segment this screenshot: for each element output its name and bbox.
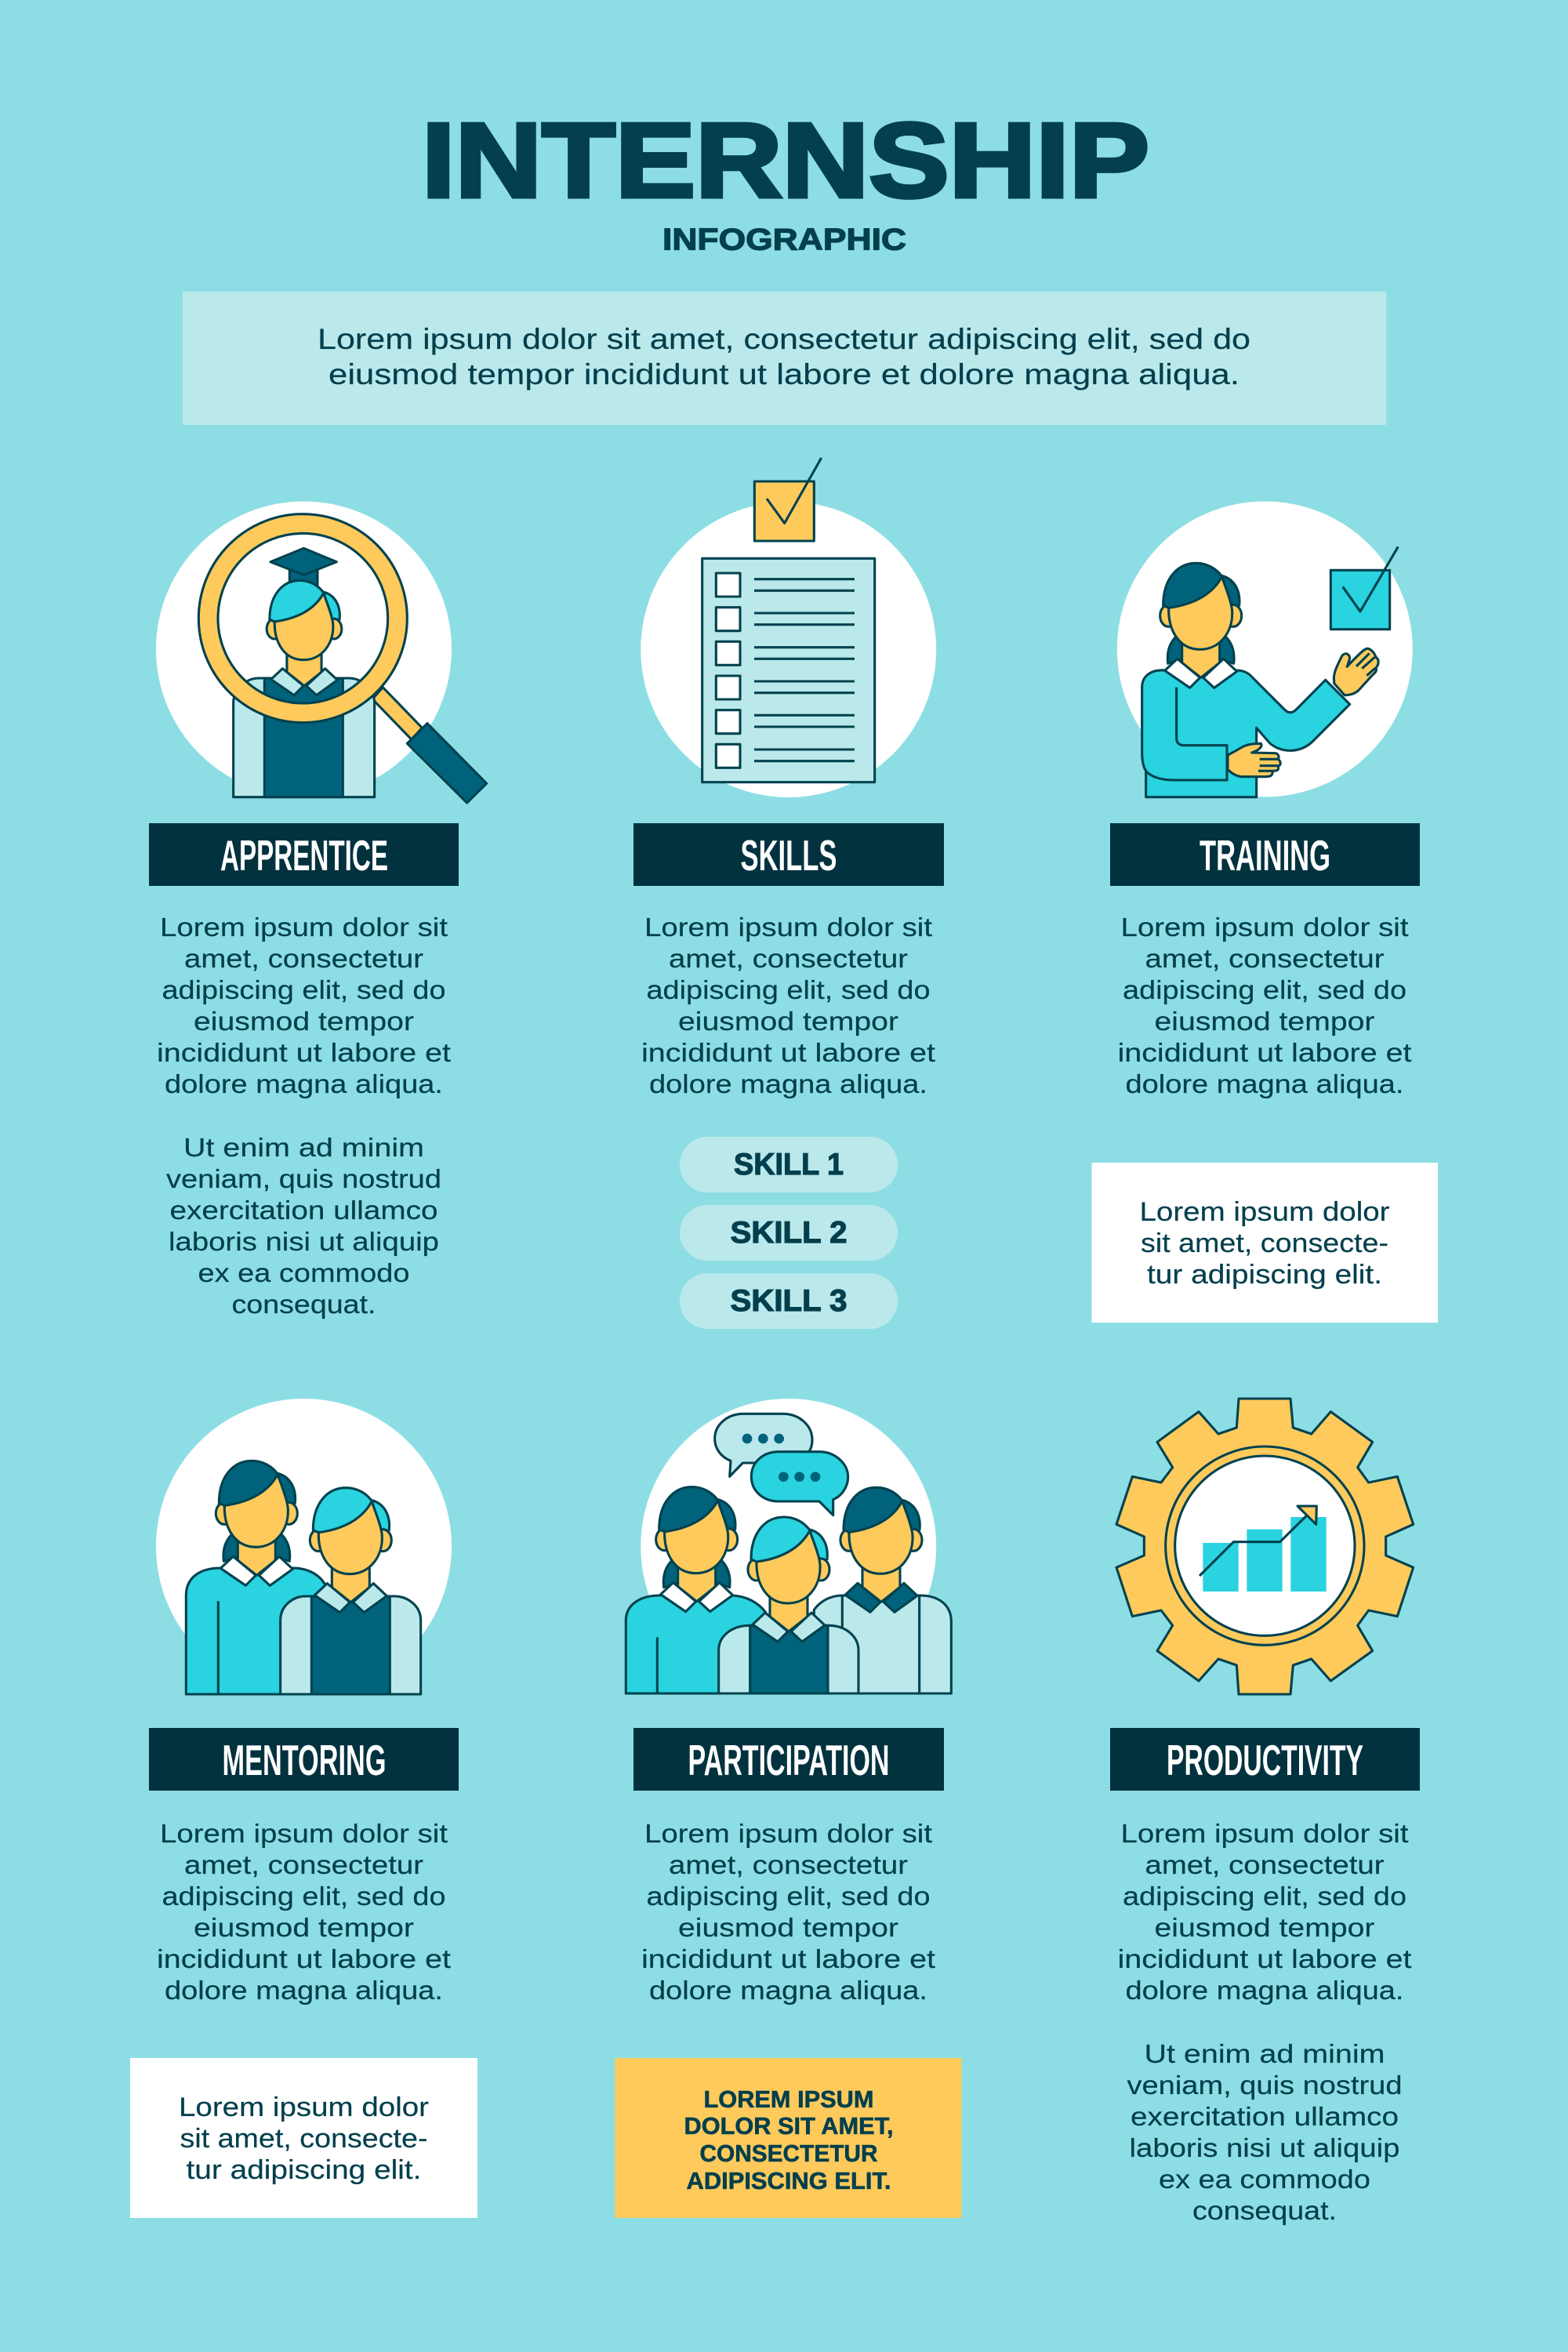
heading: participation (633, 1728, 944, 1791)
text block: apprentice: ex ea commodo (198, 1259, 409, 1288)
text block: participation: Lorem ipsum dolor sit (644, 1820, 933, 1849)
text block: productivity: laboris nisi ut aliquip (1129, 2134, 1400, 2163)
callout: mentoring (130, 2058, 477, 2218)
panel: participation (615, 1399, 961, 2218)
callout: mentoring: Lorem ipsum dolor (179, 2092, 429, 2122)
text block: mentoring: incididunt ut labore et (157, 1945, 452, 1974)
text block: apprentice: adipiscing elit, sed do (162, 976, 445, 1005)
text block: apprentice: veniam, quis nostrud (166, 1165, 441, 1194)
title: INTERNSHIP (422, 101, 1149, 220)
text block: participation: incididunt ut labore et (641, 1945, 936, 1974)
text block: productivity: ex ea commodo (1159, 2165, 1370, 2194)
text block: apprentice: exercitation ullamco (169, 1196, 437, 1225)
pill: skill 2 (680, 1205, 898, 1261)
text block: productivity: Lorem ipsum dolor sit (1121, 1820, 1409, 1849)
text block: participation: adipiscing elit, sed do (646, 1882, 930, 1911)
text block: productivity: dolore magna aliqua. (1126, 1976, 1403, 2005)
intro text: eiusmod tempor incididunt ut labore et dolore magna aliqua. (328, 358, 1240, 390)
text block: training (1118, 913, 1412, 1099)
intro text: Lorem ipsum dolor sit amet, consectetur adipiscing elit, sed do (318, 322, 1250, 355)
text block: apprentice (157, 913, 452, 1319)
panel: training (1091, 502, 1438, 1323)
text block: apprentice: Ut enim ad minim (183, 1134, 424, 1163)
pill: skill 1 (680, 1137, 898, 1192)
icon: two people (156, 1399, 452, 1694)
callout: training: tur adipiscing elit. (1147, 1260, 1382, 1290)
text block: apprentice: laboris nisi ut aliquip (169, 1228, 439, 1257)
text block: training: amet, consectetur (1145, 945, 1385, 974)
text block: apprentice: Lorem ipsum dolor sit (160, 913, 448, 942)
text block: productivity: eiusmod tempor (1154, 1914, 1375, 1943)
text block: productivity: adipiscing elit, sed do (1123, 1882, 1406, 1911)
pill: skill 3: SKILL 3 (731, 1284, 847, 1318)
text block: skills: Lorem ipsum dolor sit (644, 913, 933, 942)
intro text (318, 322, 1250, 390)
text block: productivity: exercitation ullamco (1131, 2103, 1399, 2132)
text block: training: eiusmod tempor (1154, 1007, 1375, 1036)
heading: mentoring (149, 1728, 459, 1791)
callout: training: sit amet, consecte- (1141, 1229, 1388, 1258)
callout: participation: LOREM IPSUM (704, 2085, 873, 2113)
icon: magnifier over graduate (156, 502, 487, 803)
callout: training: Lorem ipsum dolor (1140, 1197, 1389, 1227)
text block: skills: eiusmod tempor (678, 1007, 898, 1036)
callout: participation: ADIPISCING ELIT. (687, 2167, 891, 2194)
heading: mentoring: MENTORING (223, 1736, 386, 1784)
text block: apprentice: consequat. (232, 1290, 376, 1319)
text block: training: adipiscing elit, sed do (1123, 976, 1406, 1005)
text block: participation: amet, consectetur (669, 1851, 908, 1880)
callout: participation (615, 2058, 961, 2218)
text block: training: dolore magna aliqua. (1126, 1070, 1403, 1099)
heading: training (1110, 823, 1420, 886)
text block: apprentice: eiusmod tempor (194, 1007, 414, 1036)
text block: productivity: Ut enim ad minim (1145, 2040, 1385, 2069)
text block: apprentice: incididunt ut labore et (157, 1039, 452, 1068)
text block: productivity: consequat. (1192, 2197, 1337, 2226)
pill: skill 3 (680, 1273, 898, 1329)
text block: mentoring: eiusmod tempor (194, 1914, 414, 1943)
heading: skills (633, 823, 944, 886)
callout: participation: DOLOR SIT AMET, (684, 2112, 894, 2140)
heading: training: TRAINING (1200, 831, 1330, 880)
callout: training (1091, 1163, 1438, 1323)
heading: skills: SKILLS (740, 831, 837, 880)
heading: productivity (1110, 1728, 1420, 1791)
heading: productivity: PRODUCTIVITY (1167, 1736, 1363, 1784)
subtitle: INFOGRAPHIC (662, 223, 906, 257)
callout: mentoring: sit amet, consecte- (180, 2124, 428, 2154)
text block: mentoring: amet, consectetur (184, 1851, 423, 1880)
text block: productivity: incididunt ut labore et (1118, 1945, 1412, 1974)
text block: productivity: amet, consectetur (1145, 1851, 1385, 1880)
text block: skills: dolore magna aliqua. (649, 1070, 927, 1099)
icon: group conversation (626, 1399, 951, 1694)
text block: participation: eiusmod tempor (678, 1914, 898, 1943)
text block: apprentice: amet, consectetur (184, 945, 423, 974)
pill: skill 1: SKILL 1 (734, 1148, 844, 1181)
pill: skill 2: SKILL 2 (731, 1216, 847, 1250)
text block: mentoring (157, 1820, 452, 2005)
text block: mentoring: dolore magna aliqua. (165, 1976, 443, 2005)
callout: participation: CONSECTETUR (699, 2140, 878, 2167)
text block: mentoring: Lorem ipsum dolor sit (160, 1820, 448, 1849)
heading: apprentice (149, 823, 459, 886)
text block: apprentice: dolore magna aliqua. (165, 1070, 443, 1099)
text block: productivity (1118, 1820, 1412, 2226)
text block: skills: incididunt ut labore et (641, 1039, 936, 1068)
text block: participation: dolore magna aliqua. (649, 1976, 927, 2005)
text block: skills: adipiscing elit, sed do (646, 976, 930, 1005)
icon: checklist (641, 458, 936, 797)
text block: skills: amet, consectetur (669, 945, 908, 974)
callout: mentoring: tur adipiscing elit. (187, 2155, 422, 2185)
panel: mentoring (130, 1399, 477, 2218)
text block: training: incididunt ut labore et (1118, 1039, 1412, 1068)
text block: participation (641, 1820, 936, 2005)
intro panel (183, 292, 1386, 425)
heading: apprentice: APPRENTICE (220, 831, 388, 880)
panel: productivity (1110, 1399, 1420, 2226)
text block: skills (641, 913, 936, 1099)
panel: apprentice (149, 502, 487, 1319)
text block: mentoring: adipiscing elit, sed do (162, 1882, 445, 1911)
heading: participation: PARTICIPATION (688, 1736, 889, 1784)
text block: productivity: veniam, quis nostrud (1127, 2071, 1402, 2100)
icon: trainer with checkbox (1117, 502, 1413, 797)
panel: skills (633, 458, 944, 1329)
icon: gear with growth chart (1116, 1399, 1414, 1694)
text block: training: Lorem ipsum dolor sit (1121, 913, 1409, 942)
